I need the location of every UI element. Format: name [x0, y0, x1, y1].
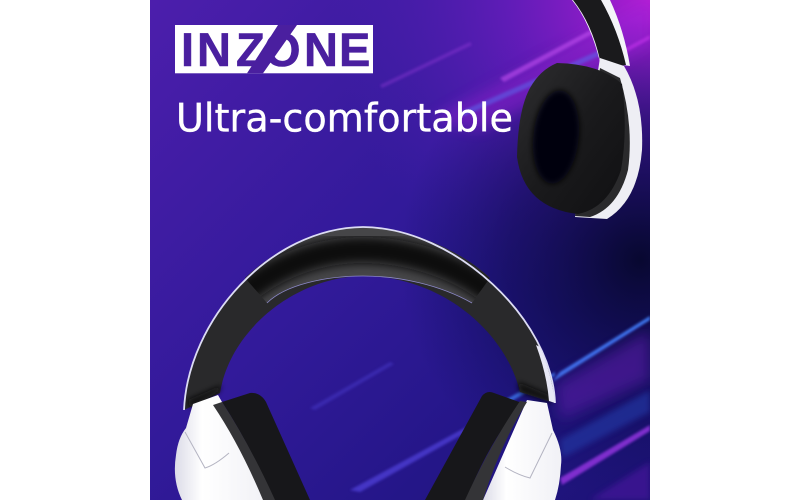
headband end shading: [188, 382, 552, 408]
background panel: [150, 0, 650, 500]
headband segment: [572, 0, 630, 66]
headband: [184, 276, 554, 410]
logo: INZONE: INZONE: [181, 23, 370, 76]
ear pad rim: [575, 68, 630, 217]
ear pad: [517, 63, 625, 214]
headband top segment: [245, 228, 490, 303]
left ear cup: [175, 395, 266, 500]
headband highlight: [184, 227, 555, 410]
white ear cup shell: [575, 58, 642, 219]
infographic canvas: [150, 0, 650, 500]
right ear pad: [425, 392, 522, 500]
right ear cup: [483, 400, 561, 500]
icon: side view headphone: [517, 0, 642, 219]
title: Ultra-comfortable: [176, 96, 513, 142]
light streaks: [310, 0, 650, 500]
ear pad opening: [530, 88, 581, 185]
left ear pad: [222, 393, 310, 500]
icon: main headphone: [175, 225, 561, 500]
